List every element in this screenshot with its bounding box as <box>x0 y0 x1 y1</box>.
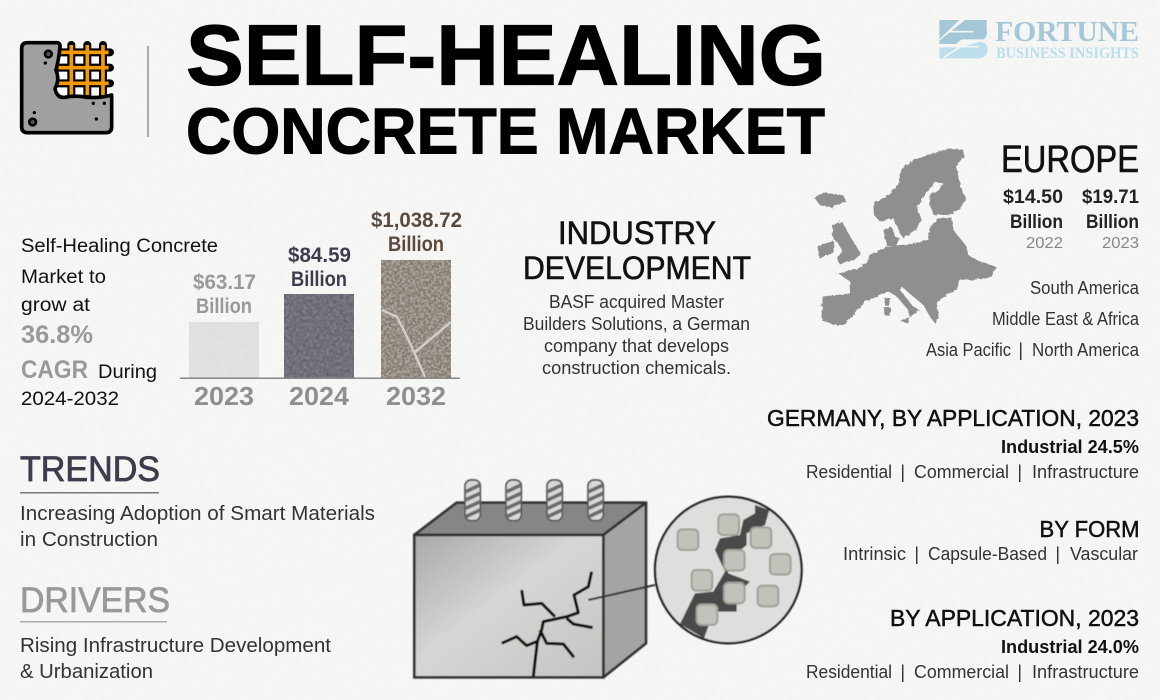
Europe region values: $19.71 <box>1082 187 1139 208</box>
bar 2023: Billion <box>196 295 252 318</box>
Europe region values <box>1001 139 1139 252</box>
CAGR text block: Market to <box>21 267 106 288</box>
Germany by application: Industrial 24.5% <box>1001 437 1139 457</box>
CAGR text block: grow at <box>21 295 91 316</box>
bar 2024: Billion <box>291 268 347 291</box>
drivers: Rising Infrastructure Development <box>20 635 331 657</box>
CAGR text block: Self-Healing Concrete <box>21 236 218 257</box>
drivers: DRIVERS <box>20 581 170 620</box>
header divider <box>147 46 149 137</box>
Europe region values: Billion <box>1010 212 1063 233</box>
trends <box>20 450 375 551</box>
title: SELF-HEALING <box>186 8 826 104</box>
map: Europe <box>814 148 997 325</box>
by form <box>843 516 1140 564</box>
Europe region values: EUROPE <box>1001 139 1139 181</box>
by form: | <box>1055 544 1060 564</box>
trends: Increasing Adoption of Smart Materials <box>20 503 375 525</box>
other regions list: | <box>1018 340 1023 360</box>
bar 2032: Billion <box>388 233 444 256</box>
Germany by application: | <box>900 462 905 482</box>
bar 2024 <box>284 244 354 411</box>
CAGR text block: 36.8% <box>21 321 93 349</box>
Germany by application: Infrastructure <box>1032 462 1139 482</box>
trends: in Construction <box>20 529 158 551</box>
CAGR text block <box>21 236 218 410</box>
by form: Intrinsic <box>843 544 906 564</box>
CAGR text block: 2024-2032 <box>21 389 119 410</box>
by application: | <box>900 662 905 682</box>
by application: Residential <box>806 662 892 682</box>
bar 2032: $1,038.72 <box>371 209 462 232</box>
by form: Capsule-Based <box>928 544 1047 564</box>
Germany by application: Residential <box>806 462 892 482</box>
other regions list: South America <box>1030 278 1140 298</box>
title: CONCRETE MARKET <box>186 94 825 168</box>
Germany by application: GERMANY, BY APPLICATION, 2023 <box>767 405 1139 431</box>
by application: | <box>1017 662 1022 682</box>
bar chart <box>180 209 462 411</box>
industry development: Builders Solutions, a German <box>523 314 750 334</box>
bar 2032: 2032 <box>386 381 446 411</box>
bar 2032 <box>371 209 462 411</box>
Europe region values: $14.50 <box>1003 187 1063 208</box>
bar 2023 <box>189 271 259 411</box>
logo: Fortune Business Insights: BUSINESS INSIGHTS <box>996 45 1139 62</box>
other regions list: Middle East & Africa <box>992 309 1140 329</box>
bar 2023: 2023 <box>194 381 254 411</box>
other regions list: North America <box>1032 340 1140 360</box>
drivers: & Urbanization <box>20 661 153 683</box>
industry development: INDUSTRY <box>558 215 716 251</box>
CAGR text block: During <box>98 362 157 383</box>
Germany by application: | <box>1017 462 1022 482</box>
by application <box>806 605 1139 682</box>
logo: Fortune Business Insights: FORTUNE <box>995 16 1139 48</box>
other regions list <box>926 278 1140 360</box>
industry development: company that develops <box>544 336 729 356</box>
by application: BY APPLICATION, 2023 <box>890 605 1139 631</box>
by form: BY FORM <box>1040 516 1140 542</box>
logo: Fortune Business Insights <box>939 16 1139 62</box>
by form: | <box>914 544 919 564</box>
Europe region values: 2022 <box>1026 235 1063 252</box>
by application: Commercial <box>914 662 1009 682</box>
illustration: cracked concrete block with magnified capsules <box>414 480 802 677</box>
bar 2024: $84.59 <box>288 244 351 267</box>
icon: concrete with exposed rebar <box>22 43 112 133</box>
Europe region values: Billion <box>1086 212 1139 233</box>
industry development: BASF acquired Master <box>549 292 724 312</box>
industry development <box>523 215 751 378</box>
drivers <box>20 581 331 683</box>
trends: TRENDS <box>20 450 160 489</box>
by application: Industrial 24.0% <box>1001 637 1139 657</box>
CAGR text block: CAGR <box>21 356 88 384</box>
by application: Infrastructure <box>1032 662 1139 682</box>
other regions list: Asia Pacific <box>926 340 1011 360</box>
Germany by application: Commercial <box>914 462 1009 482</box>
by form: Vascular <box>1070 544 1138 564</box>
industry development: DEVELOPMENT <box>523 250 751 286</box>
title <box>186 8 826 168</box>
Europe region values: 2023 <box>1102 235 1139 252</box>
industry development: construction chemicals. <box>542 358 731 378</box>
Germany by application <box>767 405 1139 482</box>
bar 2024: 2024 <box>289 381 350 411</box>
bar 2023: $63.17 <box>193 271 256 294</box>
